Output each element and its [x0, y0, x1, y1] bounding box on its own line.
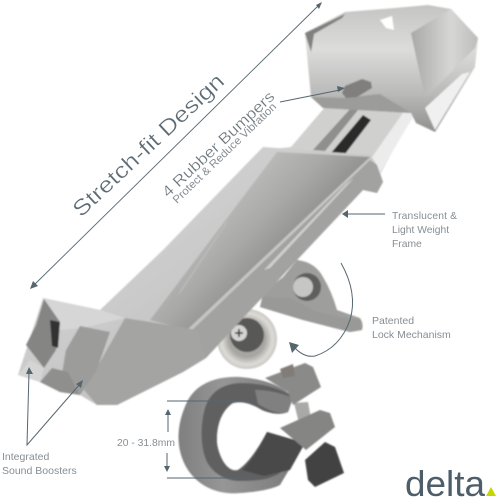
locking lever [260, 260, 363, 332]
label: dimension: 20 - 31.8mm [117, 437, 175, 449]
heading: Stretch-fit Design: Stretch-fit Design [67, 68, 229, 222]
stretch-fit arrow [30, 2, 322, 289]
arrow: frame [342, 210, 385, 218]
label: sound boosters: Sound Boosters [2, 465, 77, 477]
label: frame: Translucent & [392, 211, 457, 222]
left head front [84, 318, 206, 405]
rail spring [331, 115, 371, 154]
label: frame: Frame [392, 239, 422, 250]
top screw head [280, 364, 295, 378]
arrow: rubber bumper [280, 86, 345, 102]
tray inset [150, 152, 370, 330]
left head highlights [18, 298, 125, 395]
tray streak [178, 220, 228, 296]
upper clamp block [265, 363, 321, 405]
clamp screw [294, 402, 312, 427]
rail right side [370, 110, 416, 176]
label: sound boosters: Integrated [2, 451, 49, 463]
top head [305, 5, 478, 132]
label: lock mechanism: Patented [372, 315, 414, 327]
arrows: sound boosters [26, 367, 83, 445]
rubber bumper [342, 79, 372, 98]
main tray body [18, 147, 383, 405]
clamp ring [178, 377, 305, 493]
main rail [265, 100, 416, 178]
clamp knob [305, 442, 344, 487]
lower clamp block [280, 410, 335, 450]
label: Protect and Reduce Vibration: Protect & Reduce Vibration [171, 101, 279, 206]
dimension marker [164, 401, 250, 478]
label: 4 Rubber Bumpers: 4 Rubber Bumpers [159, 88, 278, 201]
rail slot [313, 108, 358, 151]
label: frame: Light Weight [392, 225, 449, 236]
label: lock mechanism: Lock Mechanism [372, 329, 451, 341]
arrow: lock rotation [289, 263, 353, 356]
mount wheel [217, 309, 277, 369]
tray lower frame [190, 160, 383, 358]
